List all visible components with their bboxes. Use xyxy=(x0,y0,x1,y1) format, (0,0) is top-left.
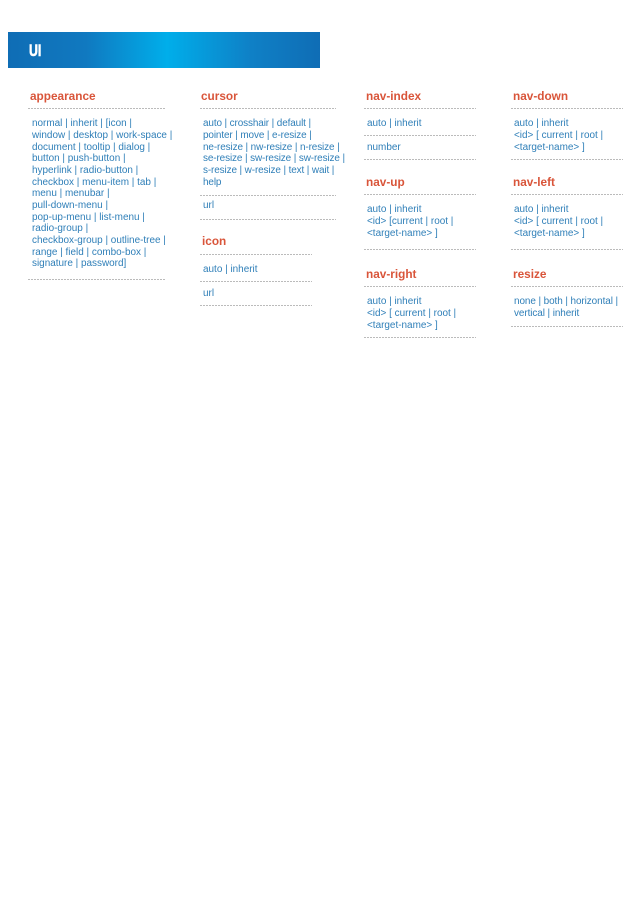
heading: resize: resize xyxy=(513,267,546,281)
heading: nav-index: nav-index xyxy=(366,89,421,103)
values: cursor: se-resize | sw-resize | sw-resize | xyxy=(203,153,345,164)
values: nav-up: <id> [current | root | xyxy=(367,216,453,227)
values: nav-down: <id> [ current | root | xyxy=(514,130,603,141)
values: nav-left: auto | inherit xyxy=(514,204,569,215)
values: appearance: signature | password] xyxy=(32,258,126,269)
values: appearance: radio-group | xyxy=(32,223,88,234)
heading: cursor: cursor xyxy=(201,89,238,103)
value: number: number xyxy=(367,142,401,153)
values: appearance: hyperlink | radio-button | xyxy=(32,165,138,176)
values: nav-right: <id> [ current | root | xyxy=(367,308,456,319)
values: appearance: normal | inherit | [icon | xyxy=(32,118,132,129)
values: nav-left: <id> [ current | root | xyxy=(514,216,603,227)
heading: nav-left: nav-left xyxy=(513,175,555,189)
banner xyxy=(8,32,320,68)
panel: nav-index xyxy=(364,89,476,160)
values: appearance: pop-up-menu | list-menu | xyxy=(32,212,145,223)
values: appearance: pull-down-menu | xyxy=(32,200,108,211)
values: appearance: checkbox-group | outline-tree | xyxy=(32,235,166,246)
panel: icon xyxy=(200,234,312,306)
values: nav-up: <target-name> ] xyxy=(367,228,438,239)
values: appearance: menu | menubar | xyxy=(32,188,110,199)
panel: nav-right xyxy=(364,267,476,338)
values: nav-right xyxy=(367,296,456,331)
values: appearance: range | field | combo-box | xyxy=(32,247,146,258)
heading: appearance: appearance xyxy=(30,89,96,103)
panel: nav-up xyxy=(364,175,476,250)
values: nav-down: <target-name> ] xyxy=(514,142,585,153)
values: appearance: document | tooltip | dialog | xyxy=(32,142,150,153)
values: cursor: auto | crosshair | default | xyxy=(203,118,311,129)
values: appearance: checkbox | menu-item | tab | xyxy=(32,177,156,188)
values: resize: none | both | horizontal | xyxy=(514,296,618,307)
values: nav-up xyxy=(367,204,453,239)
values: cursor: help xyxy=(203,177,221,188)
value: auto inherit: auto | inherit xyxy=(367,118,422,129)
values: nav-left: <target-name> ] xyxy=(514,228,585,239)
values: nav-down: auto | inherit xyxy=(514,118,569,129)
panel: appearance xyxy=(28,89,172,280)
heading: nav-down: nav-down xyxy=(513,89,568,103)
panel: nav-left xyxy=(511,175,623,250)
values: nav-right: <target-name> ] xyxy=(367,320,438,331)
values: cursor: s-resize | w-resize | text | wait | xyxy=(203,165,334,176)
values: appearance: button | push-button | xyxy=(32,153,126,164)
panel: resize xyxy=(511,267,623,327)
values: nav-left xyxy=(514,204,603,239)
banner title: UI xyxy=(28,41,41,60)
panel: cursor xyxy=(200,89,345,220)
heading: nav-right: nav-right xyxy=(366,267,416,281)
heading: nav-up: nav-up xyxy=(366,175,405,189)
value: url: url xyxy=(203,200,214,211)
values: appearance: window | desktop | work-space | xyxy=(32,130,172,141)
values: nav-up: auto | inherit xyxy=(367,204,422,215)
values: nav-right: auto | inherit xyxy=(367,296,422,307)
panel: nav-down xyxy=(511,89,623,160)
values: cursor xyxy=(203,118,345,188)
values: resize xyxy=(514,296,618,319)
values: cursor: pointer | move | e-resize | xyxy=(203,130,312,141)
values: appearance xyxy=(32,118,172,269)
values: cursor: ne-resize | nw-resize | n-resize | xyxy=(203,142,340,153)
values: resize: vertical | inherit xyxy=(514,308,579,319)
value: auto inherit: auto | inherit xyxy=(203,264,258,275)
heading: icon: icon xyxy=(202,234,226,248)
value: url: url xyxy=(203,288,214,299)
values: nav-down xyxy=(514,118,603,153)
